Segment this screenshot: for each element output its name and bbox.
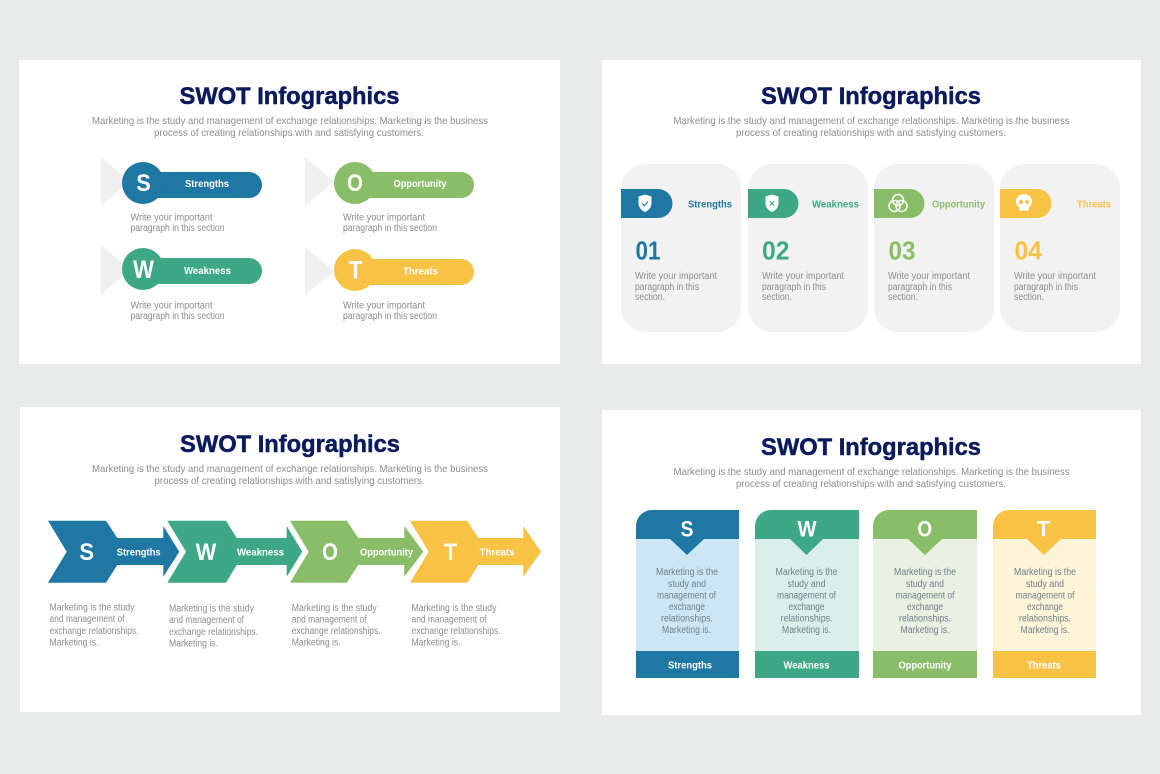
column: Strengths: study and [668,579,706,590]
column: Threats: management of [1016,590,1075,602]
item: Threats: T [348,256,362,284]
card: Opportunity: paragraph in this [888,282,952,293]
item: Opportunity: Opportunity [394,178,447,190]
title: SWOT Infographics [761,434,981,461]
item: Threats [305,247,474,322]
item: Weakness: Weakness [184,265,231,277]
arrow: Weakness: Weakness [237,546,284,558]
card: Strengths: paragraph in this [635,282,699,293]
text: Opportunity description: Marketing is the study [292,603,377,614]
arrow: Weakness [167,521,302,583]
intro text: process of creating relationships with and satisfying customers. [736,478,1006,490]
column: Threats: T [1037,517,1051,542]
text: Threats description [412,603,500,648]
column: Weakness: Weakness [784,660,830,672]
column: Opportunity: management of [896,590,955,602]
column: Opportunity: Marketing is. [900,625,950,636]
text: Strengths description [50,602,138,648]
arrow: Threats: Threats [480,546,515,558]
column: Weakness: relationships. [780,614,832,624]
column: Strengths [636,510,739,678]
column: Threats: relationships. [1019,614,1071,624]
item: Opportunity: O [347,170,363,197]
text: Opportunity description: exchange relationships. [292,626,381,637]
item: Opportunity [305,157,474,234]
intro text: Marketing is the study and management of exchange relationships. Marketing is the business [92,463,488,475]
text: Weakness description: Marketing is. [169,638,218,650]
intro text: Marketing is the study and management of exchange relationships. Marketing is the business [674,115,1070,127]
card: Threats: paragraph in this [1014,282,1078,293]
column: Threats: Threats [1027,660,1061,672]
item: Weakness: paragraph in this section [130,311,224,322]
arrow: Weakness: W [196,539,217,566]
item: Threats: paragraph in this section [343,311,437,322]
text: Weakness description: Marketing is the study [169,604,254,614]
item: Strengths [101,157,262,234]
intro text: process of creating relationships with and satisfying customers. [154,127,424,139]
icon: skull [1016,194,1032,210]
column: Opportunity: Opportunity [898,660,952,672]
intro text [92,463,488,487]
arrow: Threats: T [444,539,457,566]
column: Weakness: Marketing is the [776,567,838,578]
card: Threats: Threats [1077,198,1111,210]
card: Strengths [621,164,741,332]
intro text [674,115,1070,139]
icon: three circles [889,194,907,212]
intro text [674,466,1070,490]
column: Strengths: management of [657,590,716,602]
arrow: Strengths: Strengths [117,546,161,558]
icon: shield cross [766,194,778,212]
text: Threats description: and management of [412,614,487,626]
column: Threats: Marketing is the [1014,567,1076,578]
card: Threats [1000,164,1120,332]
column: Threats [993,510,1096,678]
card: Weakness: 02 [762,238,790,266]
intro text: Marketing is the study and management of exchange relationships. Marketing is the business [92,115,488,127]
item: Weakness: Write your important [130,300,213,312]
panel: arrow process [20,407,560,712]
card: Weakness [748,164,868,332]
column: Opportunity: study and [906,579,944,590]
item: Strengths: S [136,170,151,197]
card: Opportunity: Write your important [888,271,970,282]
column: Opportunity: Marketing is the [894,567,956,578]
item: Threats: Threats [403,266,438,278]
title: SWOT Infographics [761,83,981,110]
panel: numbered cards [602,60,1141,364]
intro text: process of creating relationships with and satisfying customers. [154,475,424,487]
card: Threats: section. [1014,292,1044,303]
column: Strengths: relationships. [661,614,713,624]
item: Weakness [101,245,262,322]
title: SWOT Infographics [180,431,400,458]
column: Threats: exchange [1027,602,1063,613]
column: Weakness: W [798,517,817,542]
text: Opportunity description: and management of [292,614,367,626]
column: Weakness: management of [777,590,836,602]
column: Threats: study and [1026,579,1064,590]
text: Opportunity description: Marketing is. [292,638,341,648]
column: Weakness [755,510,859,678]
item: Weakness: W [133,256,154,284]
intro text: Marketing is the study and management of exchange relationships. Marketing is the business [674,466,1070,478]
title: SWOT Infographics [180,83,400,110]
card: Weakness: Write your important [762,271,844,282]
card: Weakness: Weakness [812,198,859,210]
card: Threats: 04 [1014,238,1043,266]
arrow: Opportunity: Opportunity [360,546,413,558]
item: Opportunity: Write your important [343,212,425,224]
column: Strengths: Marketing is the [656,567,718,578]
arrow: Threats [410,521,541,583]
text: Weakness description [169,604,258,650]
column: Opportunity: relationships. [899,614,951,624]
card: Strengths: 01 [636,238,660,266]
intro text: process of creating relationships with and satisfying customers. [736,127,1006,139]
card: Opportunity: Opportunity [932,198,985,210]
intro text [92,115,488,139]
panel: pill layout [19,60,560,364]
column: Weakness: Marketing is. [782,625,831,636]
text: Strengths description: exchange relationships. [50,626,138,637]
column: Strengths: exchange [669,602,705,613]
column: Weakness: exchange [788,602,825,613]
text: Strengths description: and management of [50,614,125,625]
item: Opportunity: paragraph in this section [343,223,437,234]
card: Strengths: Write your important [635,271,717,282]
card: Strengths: section. [635,292,665,303]
arrow: Strengths [48,521,179,583]
text: Opportunity description [292,603,381,648]
column: Strengths: Strengths [668,660,712,672]
column: Opportunity: O [917,517,932,542]
card: Opportunity [874,164,994,332]
text: Threats description: Marketing is. [412,638,460,648]
card: Weakness: section. [762,292,792,303]
card: Weakness: paragraph in this [762,282,826,293]
icon: shield check [638,194,652,212]
column: Strengths: S [680,517,694,542]
column: Weakness: study and [788,579,826,590]
arrow: Strengths: S [79,539,94,566]
text: Weakness description: exchange relationships. [169,627,258,638]
text: Threats description: exchange relationships. [412,626,500,637]
arrow: Opportunity: O [322,539,338,566]
column: Strengths: Marketing is. [662,625,711,636]
card: Strengths: Strengths [688,198,732,210]
item: Strengths: Write your important [130,212,213,224]
arrow: Opportunity [290,521,423,583]
item: Strengths: Strengths [185,178,229,190]
text: Strengths description: Marketing is. [50,638,98,648]
column: Opportunity [873,510,977,678]
panel: column cards [602,410,1141,715]
card: Threats: Write your important [1014,271,1096,282]
column: Opportunity: exchange [907,602,943,613]
text: Strengths description: Marketing is the study [50,602,134,614]
text: Weakness description: and management of [169,615,244,626]
card: Opportunity: section. [888,292,918,303]
card: Opportunity: 03 [888,238,916,266]
item: Threats: Write your important [343,300,425,312]
text: Threats description: Marketing is the study [412,603,496,614]
item: Strengths: paragraph in this section [130,223,224,234]
column: Threats: Marketing is. [1020,625,1070,636]
